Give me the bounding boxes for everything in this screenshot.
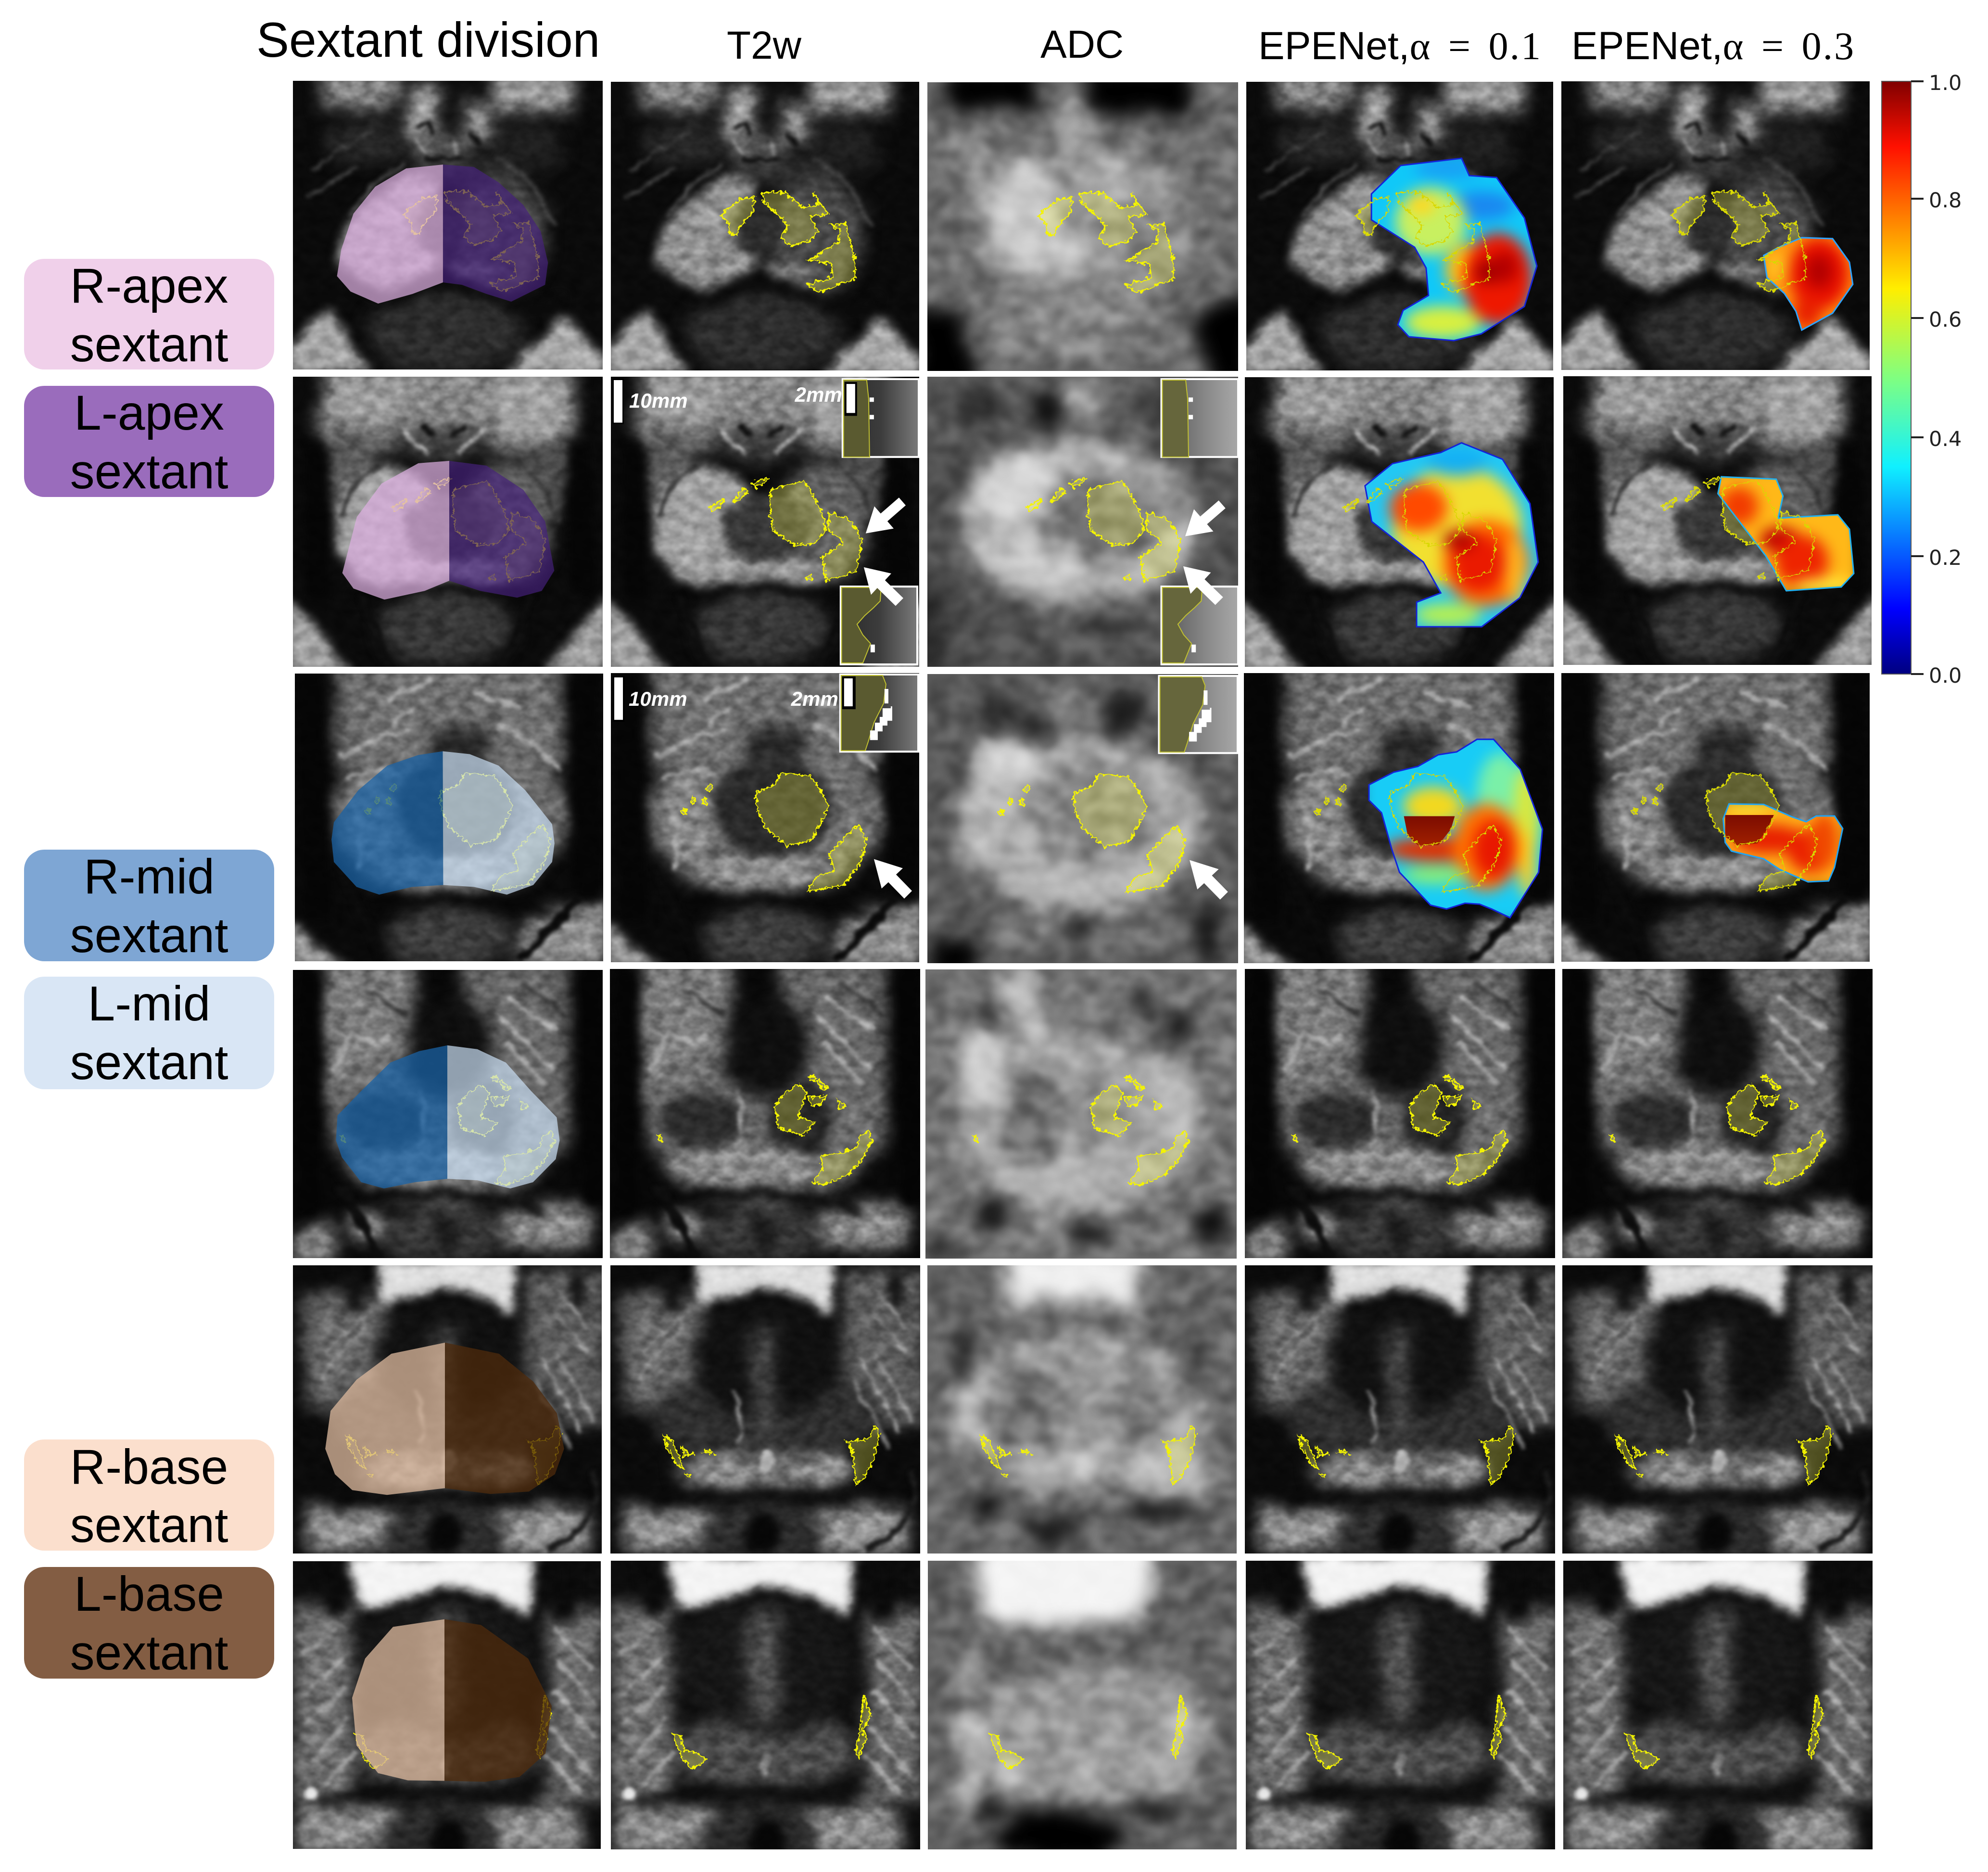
panel: row 5 EPENet 0.3: [1562, 1261, 1877, 1565]
panel: row 6 EPENet 0.3: [1563, 1556, 1875, 1872]
panel: row 3 ADC: [927, 674, 1238, 978]
arrow: lower: [864, 567, 903, 606]
panel: row 3 EPENet 0.3: [1557, 663, 1874, 968]
colorbar: 0.6: [1929, 308, 1962, 332]
panel: row 4 T2w: [610, 959, 920, 1263]
scale bar 10mm: [612, 379, 688, 424]
label: L-apex sextant: [24, 385, 274, 499]
label: R-base sextant: [24, 1439, 274, 1553]
label: R-base sextant: R-base: [70, 1439, 228, 1494]
inset: zoom: [1159, 676, 1238, 753]
label: L-mid sextant: [24, 976, 274, 1090]
colorbar: 0.4: [1929, 427, 1962, 451]
inset: upper zoom: [1162, 379, 1238, 457]
panel: row 3 sextant division: [290, 664, 608, 968]
label: R-mid sextant: sextant: [70, 908, 228, 963]
panel: row 4 EPENet 0.3: [1562, 959, 1873, 1263]
panel: row 3 T2w: [606, 663, 924, 968]
heading: T2w: T2w: [727, 24, 802, 67]
scale bar 10mm: 10mm: [629, 389, 688, 412]
colorbar: 1.0: [1929, 71, 1962, 95]
colorbar: 0.2: [1929, 546, 1962, 570]
heading: ADC: ADC: [1040, 23, 1124, 66]
colorbar: [1882, 71, 1962, 688]
panel: row 5 ADC: [927, 1251, 1237, 1554]
inset: lower zoom: [841, 586, 917, 664]
label: L-base sextant: [24, 1566, 274, 1680]
overlay: R and L base sextants: [325, 1343, 564, 1495]
panel: row 4 ADC: [921, 969, 1237, 1261]
inset: lower zoom: [1162, 586, 1238, 664]
panel: row 4 EPENet 0.1: [1245, 959, 1555, 1263]
scale bar 10mm: 10mm: [629, 688, 687, 710]
colorbar: 0.0: [1929, 664, 1962, 688]
panel: row 6 T2w: [611, 1556, 923, 1872]
inset: zoom: [840, 675, 918, 751]
panel: row 4 sextant division: [293, 960, 603, 1263]
panel: row 6 sextant division: [293, 1556, 603, 1872]
label: L-mid sextant: L-mid: [88, 976, 211, 1031]
label: L-apex sextant: L-apex: [74, 385, 224, 440]
panel: row 1 ADC: [913, 68, 1253, 390]
label: R-base sextant: sextant: [70, 1498, 228, 1553]
panel: row 2 ADC: [913, 362, 1238, 676]
panel: row 2 sextant division: [288, 367, 608, 672]
panel: row 5 sextant division: [293, 1261, 607, 1565]
label: L-base sextant: L-base: [74, 1566, 224, 1621]
overlay: R and L base sextants: [352, 1619, 552, 1782]
label: R-apex sextant: sextant: [70, 317, 228, 372]
scale label 2mm: 2mm: [791, 688, 838, 710]
arrow: [1190, 860, 1228, 900]
overlay: R and L apex sextants: [342, 461, 554, 599]
arrow: upper: [1185, 500, 1226, 536]
panel: row 1 sextant division: [288, 71, 608, 374]
inset: upper zoom: [843, 379, 919, 457]
panel: row 1 T2w: [606, 72, 924, 375]
panel: row 6 EPENet 0.1: [1246, 1556, 1557, 1872]
panel: row 2 T2w: [606, 367, 924, 672]
heading: EPENet alpha 0.3: EPENet,α = 0.3: [1571, 24, 1855, 68]
arrow: [874, 859, 912, 899]
panel: row 2 EPENet 0.1: [1240, 368, 1558, 672]
label: L-mid sextant: sextant: [70, 1035, 228, 1090]
colorbar: 0.8: [1929, 189, 1962, 213]
arrow: lower: [1183, 566, 1223, 605]
panel: row 6 ADC: [928, 1541, 1237, 1864]
heading: Sextant division: Sextant division: [256, 13, 600, 67]
overlay: R and L mid sextants: [336, 1045, 559, 1188]
label: R-mid sextant: [24, 849, 274, 963]
overlay: R and L apex sextants: [337, 165, 548, 304]
arrow: upper: [866, 497, 906, 534]
scale label 2mm: 2mm: [795, 383, 842, 406]
panel: row 5 EPENet 0.1: [1245, 1261, 1560, 1565]
label: L-apex sextant: sextant: [70, 444, 228, 499]
panel: row 2 EPENet 0.3: [1558, 367, 1876, 670]
label: R-apex sextant: R-apex: [70, 258, 228, 313]
panel: row 1 EPENet 0.3: [1557, 72, 1874, 375]
label: R-mid sextant: R-mid: [84, 849, 215, 904]
panel: row 5 T2w: [610, 1261, 925, 1565]
panel: row 1 EPENet 0.1: [1241, 72, 1558, 375]
label: L-base sextant: sextant: [70, 1625, 228, 1680]
heading: EPENet alpha 0.1: EPENet,α = 0.1: [1258, 24, 1542, 68]
label: R-apex sextant: [24, 258, 274, 372]
overlay: R and L mid sextants: [331, 751, 555, 894]
panel: row 3 EPENet 0.1: [1239, 663, 1559, 969]
scale bar 10mm: [613, 676, 687, 722]
